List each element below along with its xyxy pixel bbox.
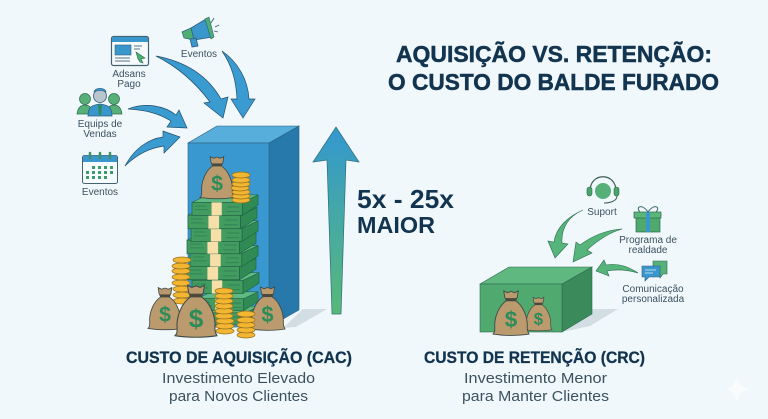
money bag left (148, 288, 182, 330)
green box (480, 267, 592, 332)
label: Eventos top: Eventos (181, 49, 217, 60)
caption: CAC: para Novos Clientes (169, 389, 308, 405)
label: Eventos calendar: Eventos (82, 187, 118, 198)
caption: CAC (126, 347, 352, 405)
icon: calendar (82, 153, 118, 184)
money bag centre (175, 285, 217, 337)
label: Programa de realdade: Programa de (619, 235, 677, 246)
arrow: up gradient (313, 127, 359, 314)
arrow: gift to box (573, 229, 622, 262)
icon: support headset (587, 177, 619, 203)
CRC illustration (480, 267, 618, 335)
money stack (187, 195, 259, 324)
coins top (231, 172, 250, 203)
label: Suport: Suport (587, 207, 617, 218)
label: Comunicação personalizada: Comunicação (622, 284, 684, 295)
small money bag (525, 297, 552, 331)
coins small (237, 311, 255, 338)
caption: CAC: CUSTO DE AQUISIÇÃO (CAC) (126, 347, 352, 367)
arrow: chat to box (596, 260, 638, 276)
multiplier label (357, 184, 455, 238)
arrow: megaphone to box (222, 51, 255, 118)
caption: CRC: CUSTO DE RETENÇÃO (CRC) (424, 347, 645, 367)
arrow: support to box (548, 210, 583, 258)
arrow: team to box (128, 105, 187, 128)
label: Adsans Pago: Pago (117, 79, 141, 90)
title (388, 40, 719, 95)
title: O CUSTO DO BALDE FURADO (388, 69, 719, 95)
icon: chat bubbles (642, 261, 667, 281)
box shadow (562, 309, 618, 332)
box shadow (283, 309, 327, 328)
label: Comunicação personalizada: personalizada (622, 294, 685, 305)
multiplier label: MAIOR (357, 212, 435, 238)
label: Programa de realdade (619, 235, 677, 256)
arrow: ads to box (156, 56, 228, 118)
label: Programa de realdade: realdade (629, 245, 668, 256)
blue box (188, 126, 299, 327)
title: AQUISIÇÃO VS. RETENÇÃO: (396, 40, 712, 67)
multiplier label: 5x - 25x (357, 184, 455, 214)
label: Equips de Vendas: Equips de (78, 119, 123, 130)
icon: megaphone (182, 17, 219, 47)
large money bag (493, 291, 529, 335)
arrow: calendar to box (125, 131, 180, 166)
caption: CRC: para Manter Clientes (462, 389, 609, 405)
coins left (172, 257, 191, 304)
caption: CRC: Investimento Menor (464, 371, 607, 387)
label: Comunicação personalizada (622, 284, 685, 305)
label: Adsans Pago: Adsans (112, 69, 146, 80)
label: Equips de Vendas (78, 119, 123, 140)
icon: sales team (77, 88, 122, 116)
icon: gift (634, 207, 661, 232)
caption: CRC (424, 347, 645, 405)
icon: sparkle (725, 376, 749, 402)
caption: CAC: Investimento Elevado (162, 371, 315, 387)
label: Adsans Pago (112, 69, 146, 90)
coins centre (215, 288, 234, 334)
money bag right (250, 287, 285, 330)
CAC illustration (148, 126, 327, 338)
top money bag (200, 157, 234, 199)
label: Equips de Vendas: Vendas (83, 129, 117, 140)
icon: browser ad (112, 36, 148, 66)
